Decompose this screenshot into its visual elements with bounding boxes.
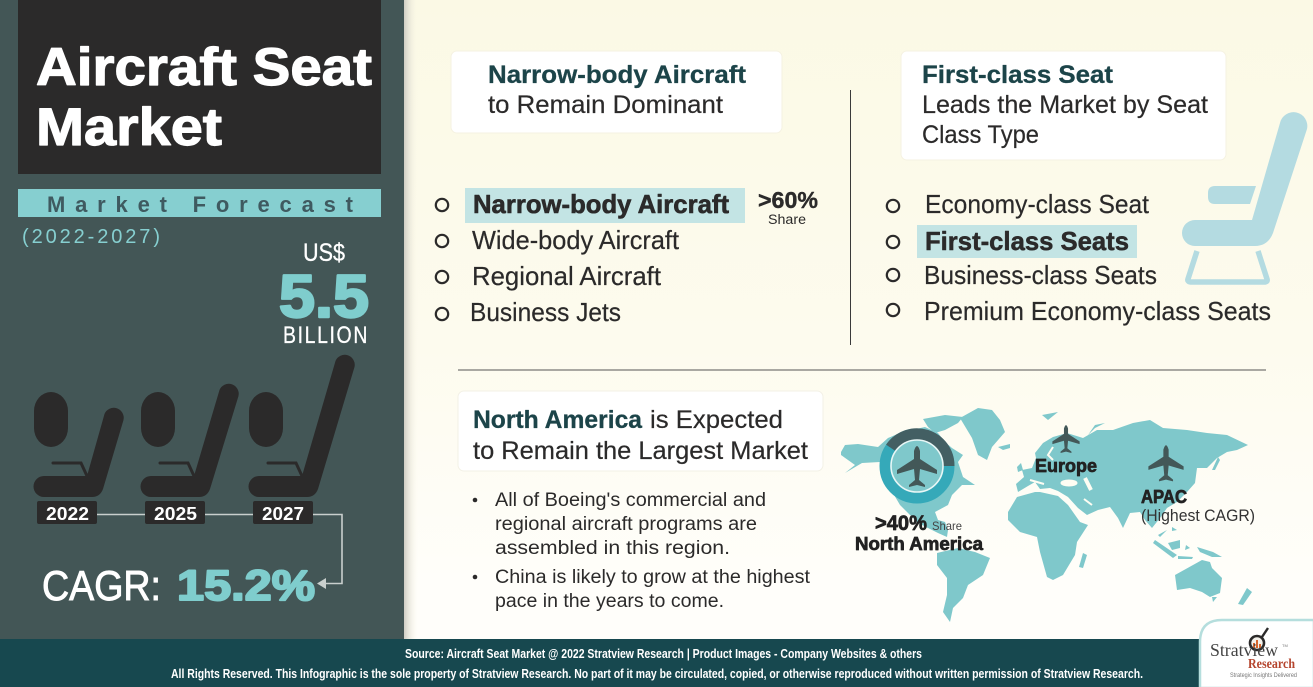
logo	[1200, 620, 1313, 687]
card: seat heading	[901, 51, 1226, 160]
title: Market	[36, 98, 222, 157]
CAGR	[42, 562, 315, 610]
inland seas	[1030, 447, 1092, 505]
seat class list: First-class Seats	[925, 226, 1129, 256]
aircraft list: Wide-body Aircraft	[472, 225, 680, 255]
market value: 5.5	[279, 263, 369, 330]
map label: apac: APAC	[1141, 487, 1187, 507]
heading: market forecast: Market Forecast	[47, 192, 354, 217]
logo: Stratview	[1210, 640, 1278, 660]
icon: seat	[1182, 112, 1307, 282]
share callout	[758, 187, 818, 227]
map label: north america: North America	[855, 534, 984, 554]
market value	[279, 239, 369, 349]
bullet points: All of Boeing's commercial and	[495, 490, 766, 511]
Asia Pacific islands	[1153, 540, 1177, 558]
bullet points: China is likely to grow at the highest	[495, 567, 811, 588]
title	[18, 0, 381, 174]
Eurasia	[1016, 420, 1248, 528]
aircraft list	[436, 188, 745, 327]
footer	[0, 639, 1313, 687]
card: aircraft heading	[451, 51, 782, 133]
seat 2025	[140, 384, 239, 497]
year 2022: 2022	[46, 504, 89, 524]
Greenland	[960, 408, 1005, 460]
logo: TM	[1282, 643, 1288, 648]
Europe and Asia islands	[1017, 463, 1023, 472]
card: region heading: to Remain the Largest Market	[473, 437, 808, 465]
bullet points: assembled in this region.	[495, 538, 730, 559]
card: aircraft heading: Narrow-body Aircraft	[488, 61, 747, 89]
aircraft list: Narrow-body Aircraft	[473, 189, 729, 219]
South America	[937, 548, 990, 622]
seat class list: Premium Economy-class Seats	[924, 296, 1271, 326]
icon: magnifier	[1250, 628, 1268, 650]
seat class list	[887, 189, 1271, 326]
Africa	[1008, 492, 1088, 580]
market value: BILLION	[283, 322, 369, 349]
share ring	[886, 434, 949, 498]
seat 2022	[34, 392, 124, 497]
logo: Strategic Insights Delivered	[1230, 672, 1297, 679]
map label: north america: >40%	[875, 512, 927, 535]
seat growth chart	[34, 355, 355, 589]
panel: aircraft type	[436, 51, 818, 327]
year 2022	[37, 501, 97, 524]
card: region heading: is Expected	[650, 406, 783, 434]
North America	[841, 427, 975, 537]
seat 2027	[249, 355, 355, 497]
seat class list: Economy-class Seat	[925, 189, 1150, 219]
card: seat heading: Leads the Market by Seat	[922, 91, 1208, 119]
bullet points: regional aircraft programs are	[495, 514, 757, 535]
footer: All Rights Reserved. This Infographic is the sole property of Stratview Research. No part of it may be circulated, copied, or otherwise reproduced without written permission of Stratview Research.	[171, 667, 1143, 681]
share callout: >60%	[758, 187, 818, 213]
aircraft list: Business Jets	[470, 297, 621, 327]
bullet points	[473, 490, 811, 612]
forecast period: (2022-2027)	[22, 226, 160, 248]
icon: plane europe	[1052, 425, 1080, 453]
map label: apac: (Highest CAGR)	[1141, 506, 1255, 525]
world map	[841, 408, 1252, 622]
card: seat heading: Class Type	[922, 121, 1039, 149]
aircraft list: Regional Aircraft	[472, 261, 662, 291]
logo: Research	[1248, 657, 1295, 672]
map label: apac	[1141, 487, 1255, 525]
map label: north america	[855, 512, 984, 554]
market value: US$	[303, 239, 345, 267]
icon: plane north america	[897, 446, 937, 487]
CAGR: CAGR:	[42, 562, 161, 609]
Australia	[1175, 560, 1222, 597]
title: Aircraft Seat	[36, 38, 372, 97]
bullet points: pace in the years to come.	[495, 591, 724, 612]
card: region heading	[458, 391, 823, 471]
card: aircraft heading: to Remain Dominant	[488, 91, 723, 119]
year 2027	[253, 501, 313, 524]
year 2025: 2025	[154, 504, 197, 524]
year 2025	[145, 501, 205, 524]
icon: plane apac	[1148, 445, 1184, 481]
map label: north america: Share	[932, 519, 962, 533]
card: region heading: North America	[473, 406, 643, 434]
share callout: Share	[768, 212, 806, 227]
footer: Source: Aircraft Seat Market @ 2022 Stratview Research | Product Images - Company Websites & others	[405, 647, 922, 661]
CAGR: 15.2%	[177, 562, 315, 610]
panel: market forecast	[0, 0, 418, 640]
map label: europe: Europe	[1035, 456, 1097, 476]
panel: seat class	[887, 51, 1307, 326]
card: seat heading: First-class Seat	[922, 61, 1114, 89]
arrow head	[317, 578, 326, 589]
year 2027: 2027	[262, 504, 304, 524]
panel: region	[458, 391, 1255, 622]
timeline connector	[97, 514, 342, 584]
seat class list: Business-class Seats	[924, 260, 1157, 290]
